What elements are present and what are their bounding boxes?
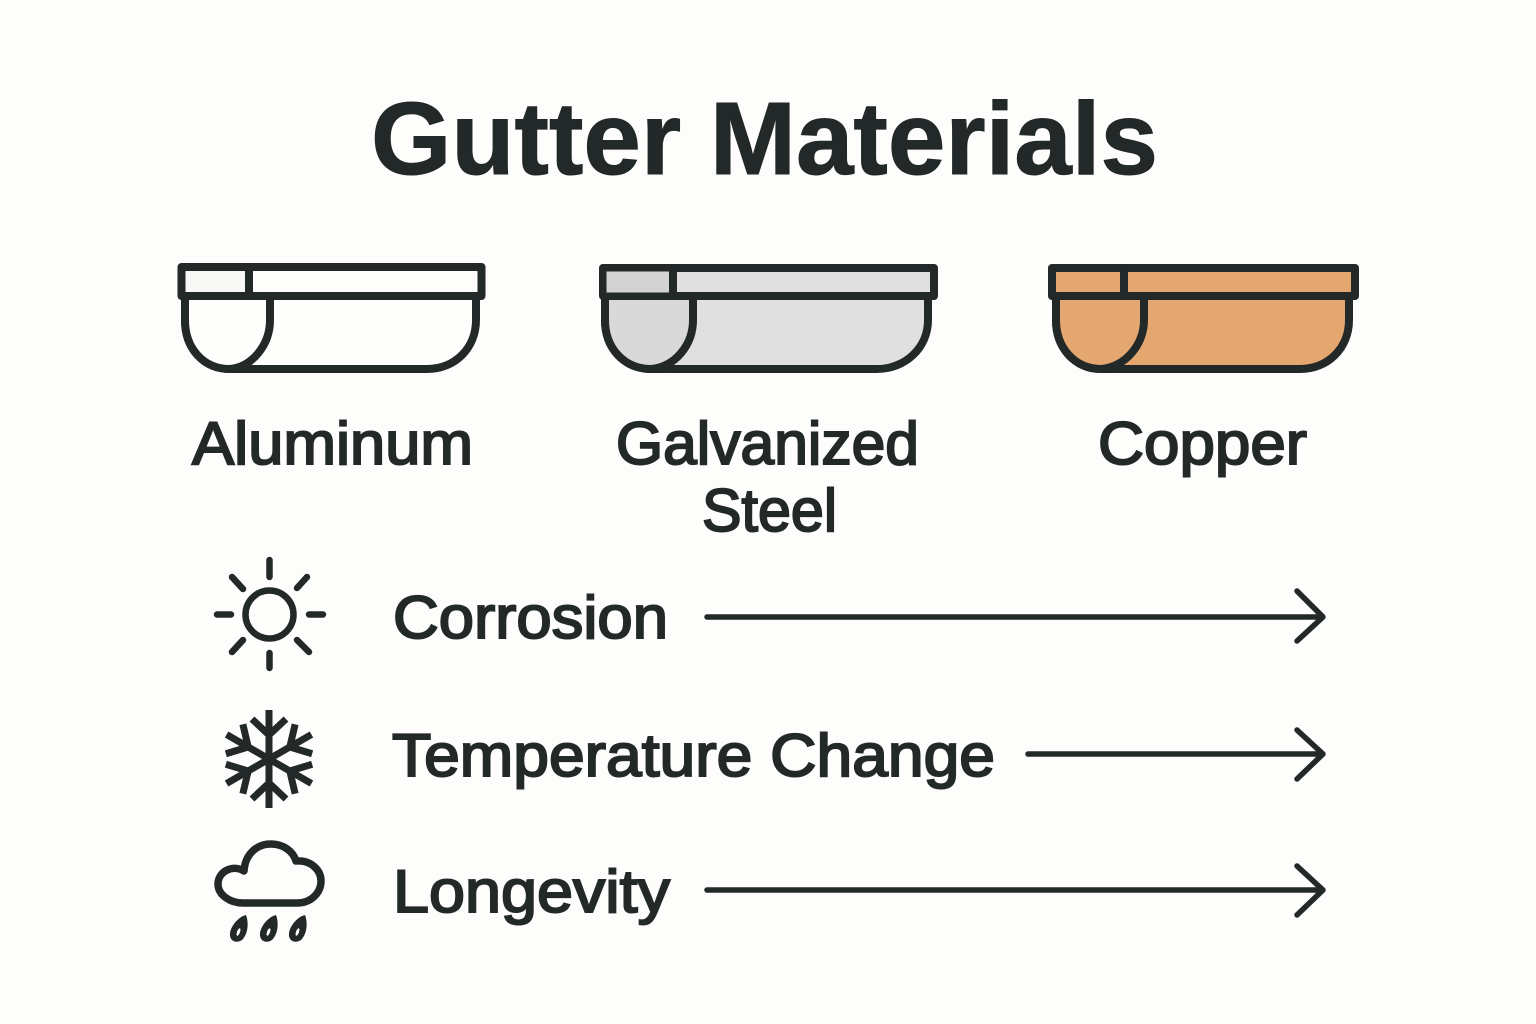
label: copper: Copper bbox=[1098, 410, 1307, 477]
label: temperature change: Temperature Change bbox=[392, 722, 995, 789]
arrow: longevity bbox=[707, 866, 1323, 915]
label: longevity: Longevity bbox=[393, 858, 670, 925]
gutter: galvanized steel bbox=[603, 268, 934, 369]
label: galvanized steel: Steel bbox=[702, 477, 837, 544]
label: galvanized steel bbox=[616, 410, 919, 544]
gutter: copper bbox=[1052, 268, 1355, 369]
label: aluminum: Aluminum bbox=[192, 410, 473, 477]
arrow: corrosion bbox=[707, 591, 1323, 641]
arrow: temperature change bbox=[1028, 730, 1323, 779]
icon: sun bbox=[217, 560, 323, 668]
title: Gutter Materials bbox=[371, 81, 1158, 196]
gutter: aluminum bbox=[182, 267, 482, 369]
icon: rain cloud bbox=[218, 844, 321, 942]
icon: snowflake bbox=[218, 710, 320, 808]
label: corrosion: Corrosion bbox=[393, 584, 668, 651]
label: galvanized steel: Galvanized bbox=[616, 410, 919, 477]
